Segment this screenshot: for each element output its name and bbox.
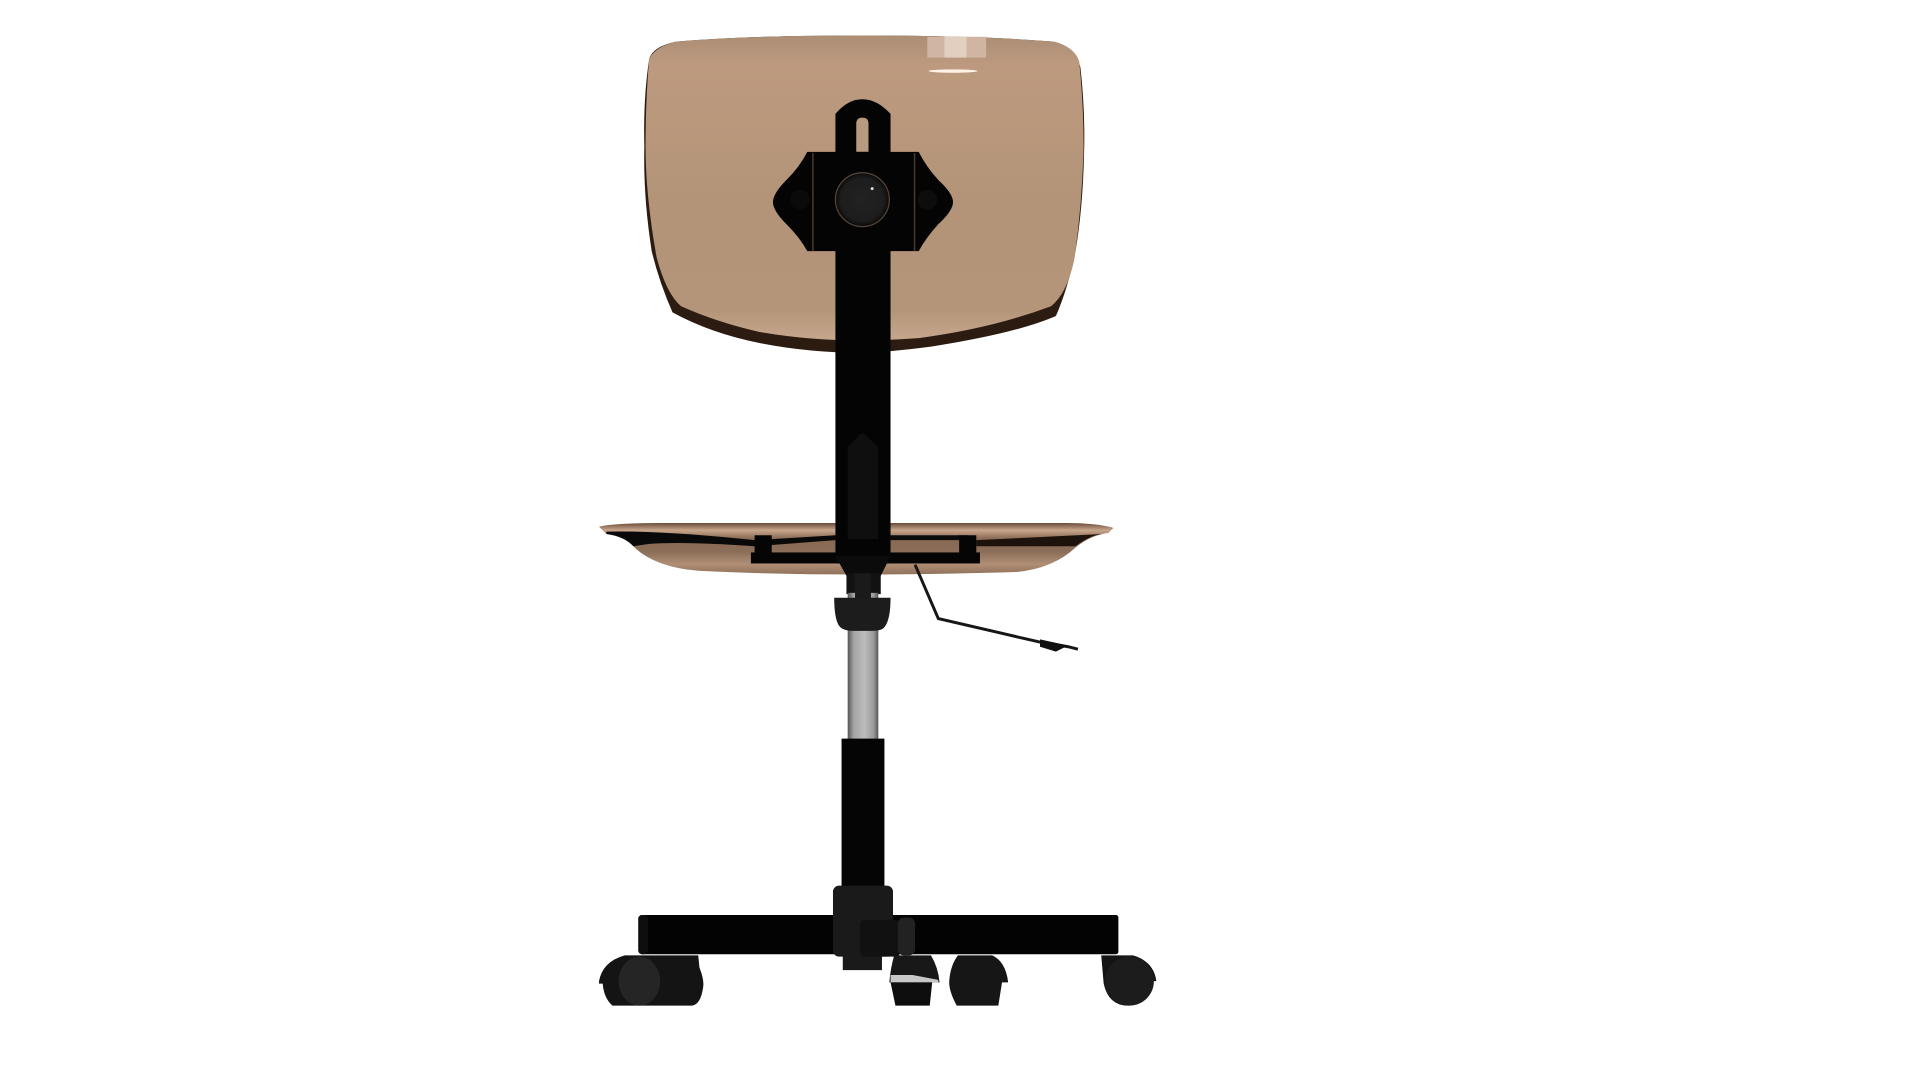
adjustment knob [835, 173, 889, 227]
column collar [834, 598, 891, 631]
backrest mounting bracket [773, 152, 953, 251]
wheelbase [599, 886, 1156, 1006]
neck [855, 573, 871, 603]
lower column sleeve [842, 739, 884, 888]
chair [599, 36, 1156, 1006]
seat mechanism plate [751, 535, 980, 594]
chair backrest [644, 36, 1084, 353]
reflection highlights [927, 37, 986, 73]
centre caster [889, 955, 940, 1006]
caster right of centre [949, 955, 1008, 1006]
far right caster [1101, 955, 1156, 1006]
central hub [833, 886, 915, 970]
gas lift chrome column [848, 593, 878, 740]
seat [599, 523, 1113, 574]
backrest support upright [835, 99, 891, 563]
height adjustment lever [915, 565, 1078, 652]
far left caster [599, 955, 703, 1006]
base beam [638, 915, 1118, 954]
